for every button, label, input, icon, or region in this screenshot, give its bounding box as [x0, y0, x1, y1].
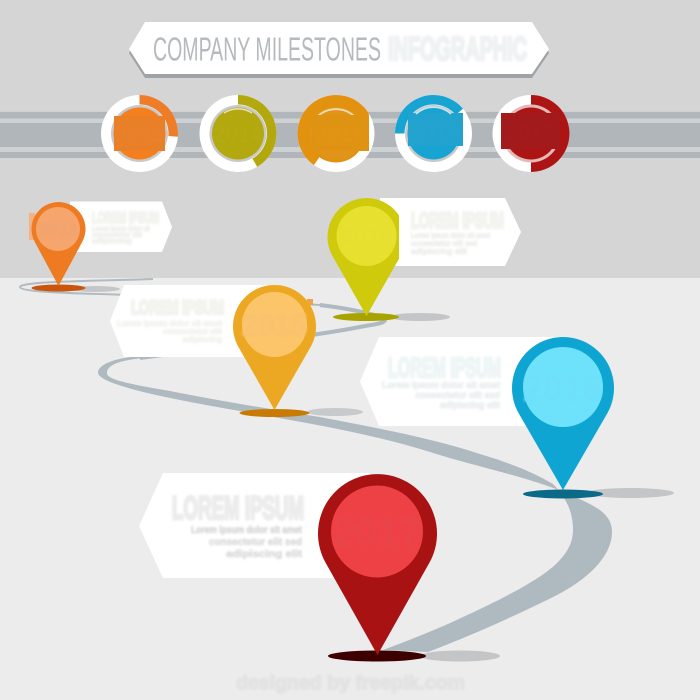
callout: blue milestone	[360, 337, 560, 426]
callout: blue milestone: consectetur elit sed	[415, 390, 500, 400]
pin shadow: amber	[307, 408, 363, 416]
year circle 4: blue	[395, 95, 472, 172]
title subtitle: INFOGRAPHIC	[388, 30, 527, 67]
pin shadow: red	[420, 650, 500, 662]
callout: orange milestone	[70, 202, 172, 252]
pin: blue 2016: 2016	[523, 368, 603, 409]
callout: yellow milestone: LOREM IPSUM	[411, 208, 504, 233]
title banner	[129, 22, 549, 78]
callout: red milestone: adipiscing elit	[226, 549, 303, 560]
year circle 1: orange: 2013	[115, 122, 164, 147]
callout: orange milestone: adipiscing	[92, 238, 132, 245]
year circle 2: olive: 2014	[214, 122, 263, 147]
callout: amber milestone: consectetur elit	[163, 327, 222, 336]
title text: COMPANY MILESTONES	[153, 30, 381, 68]
pin shadow: yellow	[390, 313, 450, 321]
callout: orange milestone: consectetur elit	[92, 232, 143, 239]
pin: orange 2013: 2013	[38, 220, 78, 240]
pin shadow: orange	[70, 286, 120, 292]
callout: blue milestone: LOREM IPSUM	[388, 352, 501, 383]
year circle 3: amber: 2015	[316, 122, 364, 147]
year circle 5: red: 2017	[506, 120, 554, 145]
callout: yellow milestone: Lorem ipsum dolor sit amet	[411, 231, 490, 240]
callout: red milestone: consectetur elit sed	[209, 537, 302, 548]
pin: yellow 2014	[328, 198, 406, 321]
pin: red 2017	[318, 474, 437, 662]
pin: amber 2015	[233, 285, 316, 417]
year circle 2: olive	[200, 95, 276, 172]
year circle 1: orange	[101, 95, 178, 172]
callout: amber milestone: Lorem ipsum dolor sit amet	[117, 319, 222, 328]
pin: yellow 2014: 2014	[342, 224, 392, 249]
pin shadow: blue	[586, 488, 674, 498]
callout: yellow milestone: consectetur elit sed	[411, 239, 477, 248]
callout: orange milestone: Lorem ipsum dolor sit	[92, 226, 151, 233]
pin: red 2017: 2017	[333, 511, 421, 555]
pin: orange 2013	[29, 202, 86, 292]
callout: red milestone	[139, 473, 370, 578]
year circle 5: red	[492, 95, 570, 172]
callout: blue milestone: Lorem ipsum dolor sit amet	[382, 380, 500, 390]
callout: yellow milestone: adipiscing elit	[411, 247, 467, 256]
pin: blue 2016	[512, 337, 614, 498]
callout: red milestone: Lorem ipsum dolor sit amet	[191, 525, 303, 536]
callout: orange milestone: LOREM IPSUM	[92, 210, 159, 227]
callout: amber milestone: LOREM IPSUM	[131, 298, 224, 319]
horizontal band behind the year circles	[0, 111, 700, 158]
callout: yellow milestone	[380, 198, 521, 266]
year circle 3: amber	[289, 87, 383, 180]
background: upper wall	[0, 0, 700, 278]
callout: amber milestone	[110, 285, 270, 357]
callout: blue milestone: adipiscing elit	[440, 400, 500, 410]
callout: red milestone: LOREM IPSUM	[172, 490, 304, 526]
year circle 4: blue: 2016	[411, 118, 459, 143]
callout: amber milestone: adipiscing	[182, 335, 222, 344]
background: lower floor	[0, 278, 700, 700]
winding road	[20, 279, 612, 652]
watermark credit: designed by freepik.com	[236, 673, 465, 694]
pin: amber 2015: 2015	[242, 310, 307, 342]
